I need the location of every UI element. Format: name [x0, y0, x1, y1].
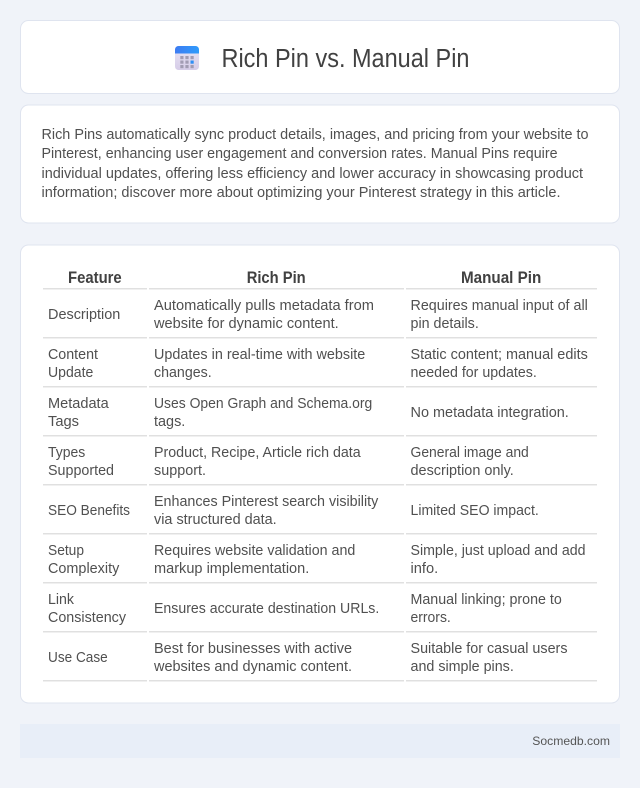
row: SEO Benefits: via structured data.	[154, 512, 277, 528]
row: Content Update: Updates in real-time with website	[154, 347, 365, 363]
panel: comparison table	[20, 245, 620, 703]
row: Content Update: changes.	[154, 365, 212, 381]
row: Link Consistency: errors.	[410, 610, 451, 626]
row: SEO Benefits: Limited SEO impact.	[410, 503, 539, 519]
table header row: Manual Pin	[461, 269, 541, 287]
row: SEO Benefits: Enhances Pinterest search visibility	[154, 494, 379, 510]
text block: summary paragraph: Pinterest, enhancing user engagement and conversion rates. Manual Pins require	[42, 145, 558, 162]
row: Setup Complexity	[43, 543, 597, 584]
table header row: Rich Pin	[247, 269, 306, 287]
row: Use Case: websites and dynamic content.	[153, 659, 352, 675]
row: Use Case: Use Case	[48, 650, 108, 666]
row: Content Update: Static content; manual edits	[410, 347, 588, 363]
footer bar	[20, 724, 620, 758]
text block: summary paragraph: individual updates, offering less efficiency and lower accuracy in showcasing product	[42, 165, 584, 182]
row: Metadata Tags: Uses Open Graph and Schema.org	[154, 396, 372, 412]
icon: calendar	[175, 46, 199, 70]
row: Metadata Tags: No metadata integration.	[410, 405, 569, 421]
row: Types Supported: support.	[154, 463, 206, 479]
row: Setup Complexity: markup implementation.	[154, 561, 309, 577]
row: Link Consistency: Manual linking; prone to	[410, 592, 562, 608]
row: Metadata Tags: tags.	[154, 414, 185, 430]
row: Link Consistency	[43, 592, 597, 632]
panel: description	[20, 105, 620, 223]
row: SEO Benefits	[43, 494, 597, 534]
footer credit: Socmedb.com	[532, 734, 610, 748]
row: Metadata Tags: Tags	[48, 414, 79, 430]
row: Setup Complexity: Simple, just upload and add	[410, 543, 586, 559]
row: Setup Complexity: Requires website validation and	[154, 543, 355, 559]
row: Content Update: needed for updates.	[410, 365, 537, 381]
row: SEO Benefits: SEO Benefits	[48, 503, 130, 519]
row: Description: website for dynamic content.	[153, 316, 339, 332]
row: Metadata Tags	[43, 396, 597, 436]
row: Description: pin details.	[410, 316, 479, 332]
row: Use Case: Suitable for casual users	[410, 641, 568, 657]
row: Description: Description	[48, 307, 120, 323]
row: Description: Requires manual input of all	[410, 298, 588, 314]
row: Link Consistency: Consistency	[48, 610, 127, 626]
row: Setup Complexity: Complexity	[48, 561, 120, 577]
table header row: Feature	[68, 269, 122, 287]
row: Use Case: and simple pins.	[410, 659, 514, 675]
row: Content Update: Update	[48, 365, 93, 381]
row: Setup Complexity: Setup	[48, 543, 84, 559]
row: Content Update: Content	[48, 347, 98, 363]
row: Link Consistency: Link	[48, 592, 75, 608]
row: Link Consistency: Ensures accurate destination URLs.	[154, 601, 379, 617]
row: Metadata Tags: Metadata	[48, 396, 110, 412]
title: Rich Pin vs. Manual Pin	[222, 45, 470, 73]
row: Setup Complexity: info.	[410, 561, 438, 577]
row: Description: Automatically pulls metadata from	[154, 298, 374, 314]
row: Types Supported: Types	[48, 445, 85, 461]
row: Content Update	[43, 347, 597, 388]
row: Types Supported	[43, 445, 597, 486]
row: Types Supported: Supported	[48, 463, 114, 479]
table header row	[43, 269, 597, 290]
row: Use Case	[43, 641, 597, 682]
panel: title card	[20, 20, 620, 94]
row: Types Supported: Product, Recipe, Article rich data	[154, 445, 362, 461]
row: Types Supported: description only.	[410, 463, 514, 479]
row: Types Supported: General image and	[410, 445, 529, 461]
row: Description	[43, 298, 597, 338]
text block: summary paragraph: Rich Pins automatically sync product details, images, and pricing from your website to	[42, 126, 588, 143]
text block: summary paragraph: information; discover more about optimizing your Pinterest strategy in this article.	[42, 184, 560, 201]
row: Use Case: Best for businesses with active	[154, 641, 352, 657]
text block: summary paragraph	[42, 126, 588, 201]
